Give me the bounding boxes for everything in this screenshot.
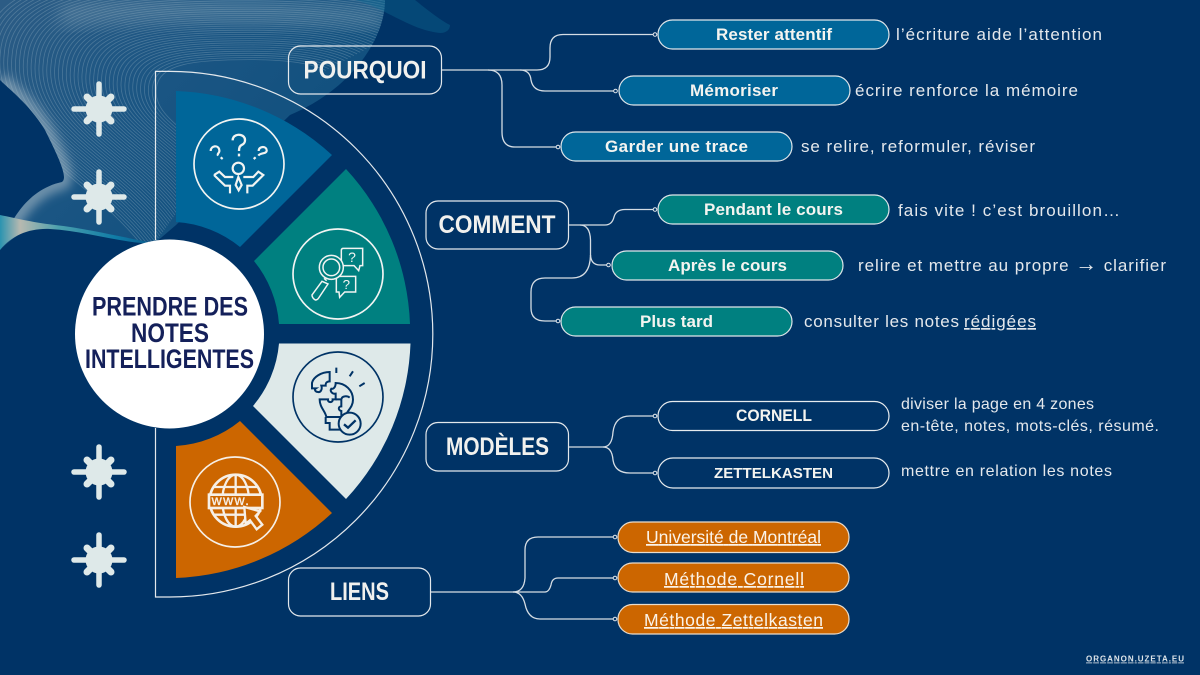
icon: globe with www and cursor [190, 457, 280, 547]
heading: modeles: MODÈLES [446, 432, 549, 461]
link: methode zettelkasten [618, 604, 849, 634]
heading: comment: COMMENT [438, 211, 556, 239]
icon: magnifier with speech bubbles: ? [343, 277, 350, 292]
pill: zettelkasten [658, 458, 889, 488]
pill: plus tard [561, 307, 792, 336]
heading: comment [426, 201, 568, 249]
half-circle outline [156, 71, 433, 597]
heading: liens: LIENS [330, 578, 389, 606]
branch: liens [288, 522, 849, 634]
icon: globe with www and cursor: www. [211, 492, 249, 508]
text: zettelkasten: mettre en relation les notes [901, 463, 1112, 480]
connectors: modeles [569, 414, 657, 475]
central circle [75, 240, 264, 428]
pill: memoriser [619, 76, 850, 105]
text: cornell: en-tête, notes, mots-clés, résumé. [901, 418, 1159, 435]
sparkle icon 1 [74, 84, 124, 134]
panel: pourquoi sector [176, 91, 332, 247]
connectors: liens [431, 535, 617, 621]
text: rester attentif: l’écriture aide l’attention [896, 25, 1102, 44]
icon: puzzle light bulb with check [293, 352, 383, 442]
pill: pendant le cours: Pendant le cours [704, 200, 843, 219]
pill: plus tard: Plus tard [640, 312, 713, 331]
sparkle icon 2 [74, 172, 124, 222]
text: cornell: diviser la page en 4 zones [901, 396, 1094, 413]
icon: magnifier with speech bubbles: ? [348, 249, 356, 265]
pill: zettelkasten: ZETTELKASTEN [714, 465, 833, 482]
central circle: NOTES [131, 318, 209, 348]
heading: liens [288, 568, 430, 616]
pill: garder une trace: Garder une trace [605, 137, 748, 156]
text: plus tard: consulter les notes [804, 312, 959, 331]
branch: comment [426, 195, 1166, 336]
panel: modeles sector [253, 344, 410, 499]
link: universite de montreal: Université de Montréal [646, 527, 821, 547]
text: cornell [901, 396, 1159, 435]
pill: rester attentif [658, 20, 889, 49]
pill: pendant le cours [658, 195, 889, 224]
pill: apres le cours: Après le cours [668, 256, 787, 275]
heading: pourquoi [288, 46, 442, 94]
icon: person with question marks [194, 119, 284, 209]
sparkle icon 3 [74, 447, 124, 497]
pill: cornell: CORNELL [736, 406, 812, 425]
panel: comment sector [254, 169, 410, 324]
pill: memoriser: Mémoriser [690, 81, 778, 100]
footer credit: ORGANON.UZETA.EU [1086, 654, 1184, 664]
branch: modeles [426, 396, 1159, 488]
link: methode cornell [618, 563, 849, 592]
panel: liens sector [176, 421, 332, 578]
link: universite de montreal [618, 522, 849, 552]
text: apres le cours: relire et mettre au propre → clarifier [858, 251, 1166, 276]
pill: rester attentif: Rester attentif [716, 25, 832, 44]
central circle: INTELLIGENTES [85, 344, 254, 374]
connectors: comment [531, 208, 657, 323]
icon: magnifier with speech bubbles [293, 229, 383, 319]
heading: modeles [426, 422, 568, 471]
text: garder une trace: se relire, reformuler, réviser [801, 137, 1035, 156]
text: plus tard [804, 312, 1036, 331]
link: methode zettelkasten: Méthode Zettelkasten [644, 610, 823, 630]
sparkle icon 4 [74, 535, 124, 585]
text: memoriser: écrire renforce la mémoire [855, 81, 1078, 100]
background wave [0, 0, 464, 260]
pill: cornell [658, 402, 889, 430]
text: plus tard: rédigées [964, 312, 1036, 331]
text: pendant le cours: fais vite ! c’est brouillon… [898, 201, 1120, 220]
connectors: pourquoi [442, 33, 657, 149]
pill: garder une trace [561, 132, 792, 161]
title: PRENDRE DES [92, 292, 248, 322]
branch: pourquoi [288, 20, 1102, 161]
heading: pourquoi: POURQUOI [304, 56, 426, 84]
pill: apres le cours [612, 251, 843, 280]
link: methode cornell: Méthode Cornell [664, 569, 804, 589]
